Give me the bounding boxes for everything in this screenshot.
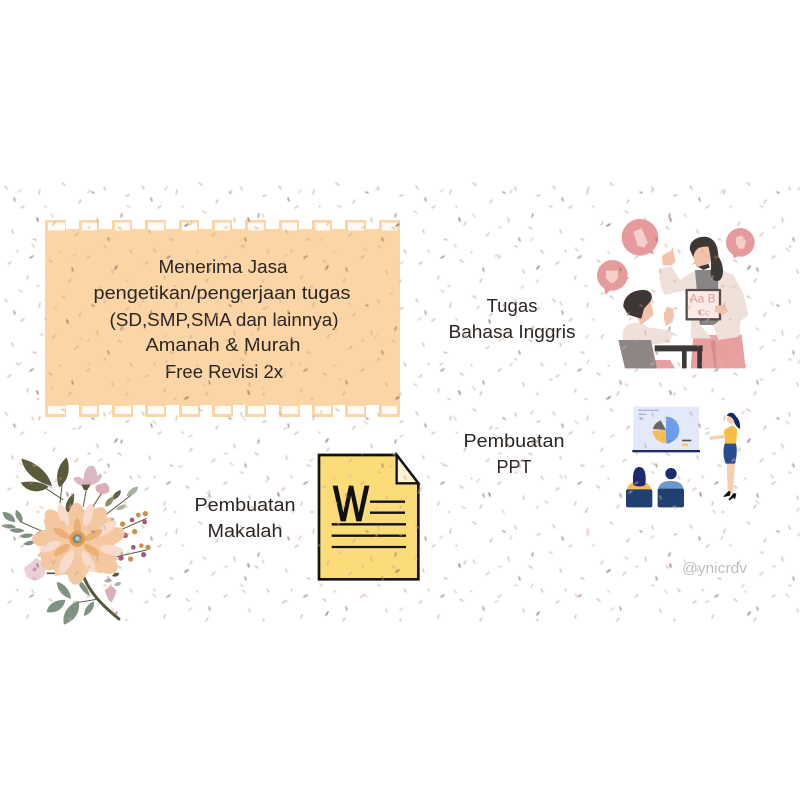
teacher: Cc bbox=[699, 308, 710, 318]
audience bbox=[626, 467, 684, 507]
main flower bbox=[31, 503, 127, 585]
icon: Word document: W bbox=[333, 477, 369, 532]
student bbox=[618, 290, 703, 368]
main stem bbox=[82, 572, 119, 619]
label: Tugas Bahasa Inggris: Bahasa Inggris bbox=[448, 321, 576, 342]
banner text: Amanah & Murah bbox=[146, 334, 300, 355]
teacher: Aa B bbox=[690, 292, 716, 306]
stems bbox=[20, 473, 147, 603]
icon: Word document bbox=[319, 455, 418, 579]
label: Pembuatan PPT: PPT bbox=[496, 456, 532, 477]
label: Pembuatan Makalah: Pembuatan bbox=[194, 494, 296, 515]
teacher bbox=[659, 237, 748, 368]
illustration: flower bouquet bbox=[1, 457, 151, 625]
illustration: presentation bbox=[626, 407, 740, 507]
banner text bbox=[94, 256, 350, 382]
presenter bbox=[709, 413, 740, 500]
label: Pembuatan PPT bbox=[464, 430, 564, 477]
banner text: Free Revisi 2x bbox=[165, 361, 284, 382]
watermark: @ynicrdv bbox=[682, 560, 748, 577]
label: Pembuatan Makalah: Makalah bbox=[208, 520, 282, 541]
banner text: (SD,SMP,SMA dan lainnya) bbox=[110, 309, 338, 330]
pink blossoms bbox=[24, 466, 117, 603]
icon: speech bubbles with hand signs bbox=[597, 219, 755, 295]
leaves bbox=[1, 457, 138, 625]
speckle overlay bbox=[0, 178, 800, 623]
label: Pembuatan PPT: Pembuatan bbox=[464, 430, 564, 451]
slide screen with pie chart bbox=[632, 407, 700, 452]
panel: service banner bbox=[45, 220, 400, 417]
label: Tugas Bahasa Inggris bbox=[448, 295, 576, 342]
banner text: pengetikan/pengerjaan tugas bbox=[94, 282, 350, 303]
label: Pembuatan Makalah bbox=[194, 494, 296, 541]
banner text: Menerima Jasa bbox=[158, 256, 288, 277]
illustration: teacher and student bbox=[597, 219, 755, 368]
berries bbox=[118, 511, 151, 562]
label: Tugas Bahasa Inggris: Tugas bbox=[486, 295, 538, 316]
